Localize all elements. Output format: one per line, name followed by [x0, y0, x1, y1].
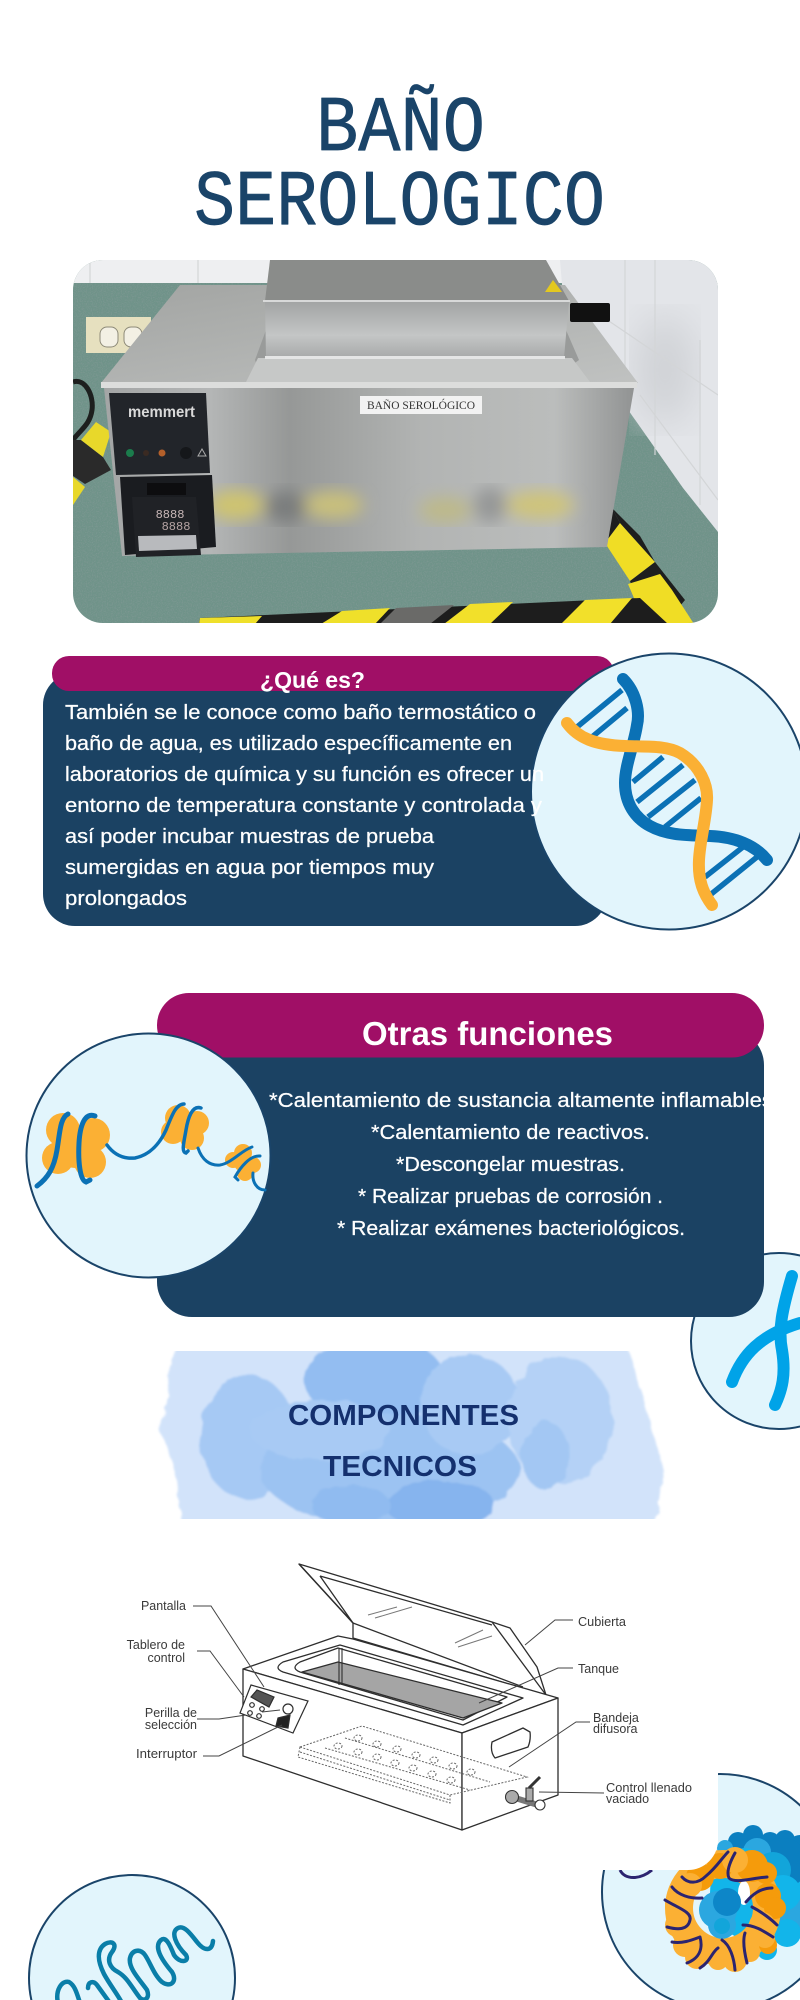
panel background — [157, 1030, 764, 1317]
title: BAÑO — [316, 83, 485, 174]
text block: descripción: prolongados — [65, 888, 187, 910]
title: SEROLOGICO — [194, 158, 605, 248]
heading bar — [157, 993, 764, 1058]
photo: baño serológico: memmert — [128, 404, 196, 421]
text block: lista de funciones: *Calentamiento de sustancia altamente inflamables — [269, 1090, 773, 1112]
text block: descripción: baño de agua, es utilizado específicamente en — [65, 733, 512, 755]
diagram labels: difusora — [593, 1722, 638, 1736]
box outline — [243, 1564, 558, 1830]
icon: dna strand circle — [29, 1875, 235, 2000]
diagram labels: Tablero de — [127, 1638, 185, 1652]
title — [194, 83, 605, 248]
diagram: componentes tecnicos — [90, 1525, 718, 1870]
text block: descripción: sumergidas en agua por tiempos muy — [65, 857, 434, 879]
diagram labels: Tanque — [578, 1662, 619, 1676]
diagram labels: Pantalla — [141, 1599, 186, 1613]
diagram labels: selección — [145, 1718, 197, 1732]
panel: qué es — [43, 654, 800, 930]
diagram labels: Control llenado — [606, 1781, 692, 1795]
heading: componentes tecnicos: COMPONENTES — [288, 1400, 519, 1432]
text block: lista de funciones: *Calentamiento de reactivos. — [371, 1122, 650, 1144]
diagram labels: control — [147, 1651, 185, 1665]
heading: otras funciones: Otras funciones — [362, 1015, 613, 1052]
icon: ring circle — [602, 1774, 800, 2000]
panel background — [43, 673, 607, 926]
text block: lista de funciones — [269, 1090, 773, 1240]
text block: descripción: entorno de temperatura constante y controlada y — [65, 795, 542, 817]
text block: descripción: También se le conoce como baño termostático o — [65, 702, 536, 724]
photo: baño serológico — [73, 260, 718, 624]
panel: otras funciones — [26, 993, 773, 1317]
watercolor banner — [158, 1351, 664, 1519]
text block: lista de funciones: * Realizar pruebas de corrosión . — [358, 1186, 663, 1208]
diagram labels: Interruptor — [136, 1747, 197, 1761]
diagram labels: Cubierta — [578, 1615, 626, 1629]
photo: baño serológico: 8888 — [162, 520, 190, 534]
photo: baño serológico: 8888 — [156, 508, 184, 522]
blue core — [710, 1825, 800, 1960]
faucet — [506, 1777, 545, 1810]
heading: qué es: ¿Qué es? — [260, 667, 365, 693]
leader lines — [193, 1606, 604, 1793]
text block: descripción: así poder incubar muestras de prueba — [65, 826, 435, 848]
diagram labels: Bandeja — [593, 1711, 639, 1725]
icon: dna circle — [531, 654, 800, 930]
heading: componentes tecnicos: TECNICOS — [323, 1451, 477, 1483]
diagram labels: Perilla de — [145, 1706, 197, 1720]
text block: descripción: laboratorios de química y su función es ofrecer un — [65, 764, 544, 786]
diagram labels — [127, 1599, 692, 1806]
text block: lista de funciones: * Realizar exámenes bacteriológicos. — [337, 1218, 685, 1240]
heading bar — [52, 656, 614, 691]
diffuser tray — [298, 1726, 527, 1803]
control panel — [240, 1685, 308, 1733]
heading: componentes tecnicos — [288, 1400, 519, 1483]
text block: descripción — [65, 702, 544, 910]
icon: nucleosome circle — [26, 1034, 270, 1278]
icon: chromosome circle — [691, 1253, 800, 1429]
photo: baño serológico: BAÑO SEROLÓGICO — [367, 398, 475, 412]
orange ring — [665, 1847, 786, 1972]
diagram labels: vaciado — [606, 1792, 649, 1806]
text block: lista de funciones: *Descongelar muestras. — [396, 1154, 625, 1176]
